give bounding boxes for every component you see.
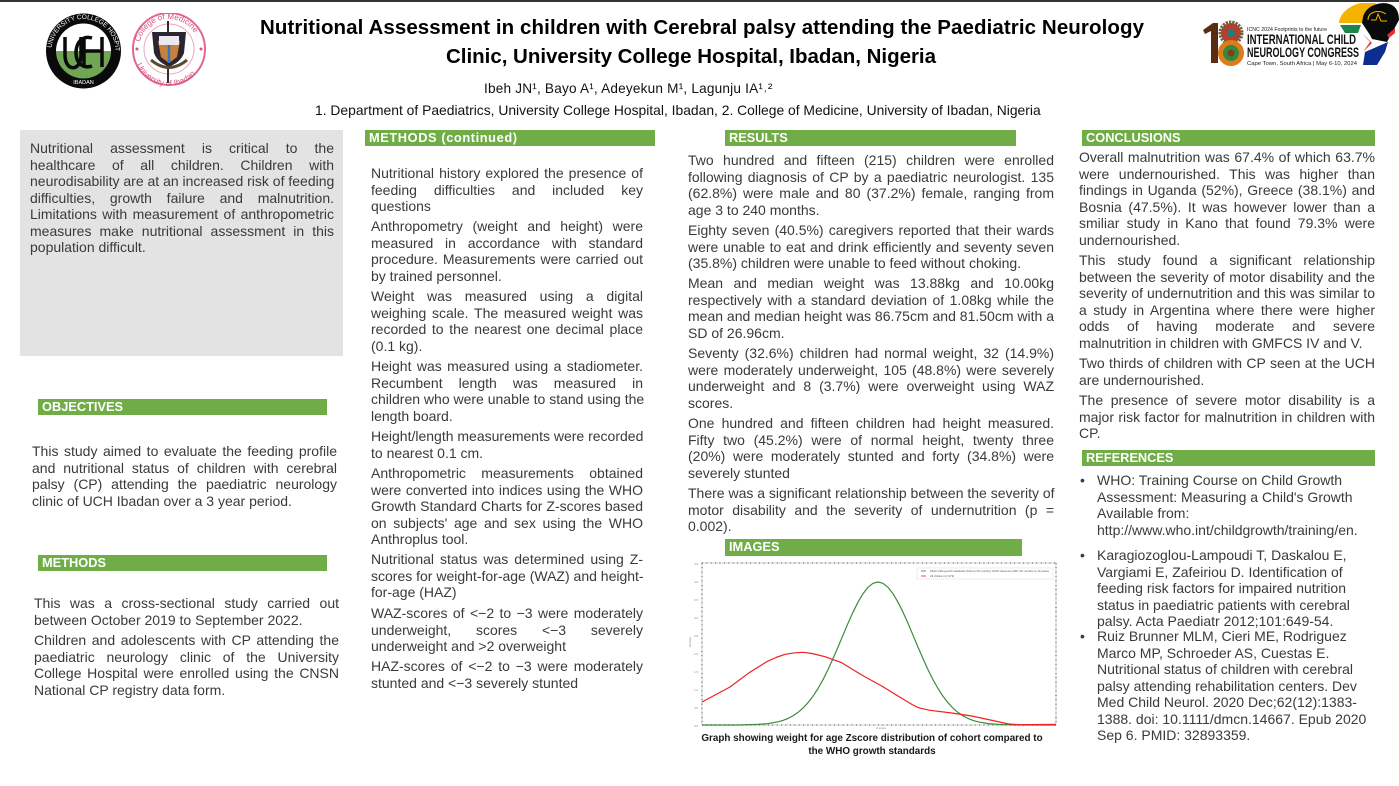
- text: height: length board.: [371, 408, 453, 424]
- chart caption: Graph showing weight for age Zscore distribution of cohort compared to: [701, 733, 1043, 744]
- text: methods enrolment: Children and adolescents with CP attending the: [34, 632, 339, 648]
- text: nutritional status: Nutritional status was determined using Z-: [371, 551, 643, 567]
- text: methods design: This was a cross-sectional study carried out: [34, 595, 339, 611]
- reference 3: [1097, 628, 1366, 743]
- bullet 2: •: [1080, 547, 1085, 563]
- text: methods enrolment: paediatric neurology clinic of the University: [34, 649, 339, 665]
- panel: introduction: [20, 130, 343, 356]
- text: feeding results: Eighty seven (40.5%) caregivers reported that their wards: [688, 222, 1054, 238]
- chart: weight-for-age z-score distribution: 2.0: [694, 652, 699, 656]
- title: Clinic, University College Hospital, Ibadan, Nigeria: [446, 45, 937, 68]
- reference 1: http://www.who.int/childgrowth/training/en.: [1097, 522, 1358, 538]
- text: anthropometry: Anthropometry (weight and height) were: [371, 218, 643, 234]
- text: mean weight and height: SD of 26.96cm.: [688, 325, 784, 341]
- reference 1: Available from:: [1097, 505, 1189, 521]
- logo: College of Medicine: University of Ibadan: [138, 62, 195, 86]
- chart: weight-for-age z-score distribution: 0.5: [694, 706, 699, 710]
- text: WAZ scores: WAZ-scores of <−2 to −3 were moderately: [371, 605, 643, 621]
- curve: WHO standard: [702, 582, 1056, 725]
- text: mean weight and height: respectively with a standard deviation of 1.08kg while the: [688, 292, 1054, 308]
- text: indices: Growth Standard Charts for Z-scores based: [371, 498, 643, 514]
- text: height precision: [371, 428, 643, 461]
- heading: images: IMAGES: [729, 539, 779, 554]
- text: weight categories: Seventy (32.6%) children had normal weight, 32 (14.9%): [688, 345, 1054, 361]
- text: weight: (0.1 kg).: [371, 338, 422, 354]
- text: introduction: Nutritional assessment is critical to the: [30, 140, 334, 156]
- reference 1: WHO: Training Course on Child Growth: [1097, 472, 1342, 488]
- text: introduction: difficulties, growth failure and malnutrition.: [30, 190, 334, 206]
- text: malnutrition comparison: were undernourished. This was higher than: [1079, 166, 1375, 182]
- text: weight: weighing scale. The measured weight was: [371, 305, 643, 321]
- text: height: Recumbent length was measured in: [371, 375, 643, 391]
- reference 2: status in paediatric patients with cerebral: [1097, 597, 1350, 613]
- text: objectives: palsy (CP) attending the paediatric neurology: [32, 476, 337, 492]
- text: mean weight and height: Mean and median weight was 13.88kg and 10.00kg: [688, 275, 1054, 291]
- text: significance: motor disability and the severity of undernutrition (p =: [688, 502, 1054, 518]
- text: height categories: Fifty two (45.2%) were of normal height, twenty three: [688, 432, 1054, 448]
- heading: methods: [38, 555, 327, 571]
- heading: references: REFERENCES: [1086, 450, 1173, 465]
- text: two thirds: [1079, 355, 1375, 388]
- text: malnutrition comparison: [1079, 149, 1376, 248]
- authors: Ibeh JN¹, Bayo A¹, Adeyekun M¹, Lagunju IA¹˒²: [484, 81, 773, 96]
- text: motor disability relationship: This study found a significant relationship: [1079, 252, 1375, 268]
- text: two thirds: Two thirds of children with CP seen at the UCH: [1079, 355, 1375, 371]
- logo: International Child Neurology Congress: ICNC 2024 Footprints to the future: [1247, 27, 1327, 33]
- text: significance: 0.002).: [688, 518, 732, 534]
- text: height categories: severely stunted: [688, 465, 790, 481]
- text: enrolment results: following diagnosis of CP by a paediatric neurologist. 135: [688, 169, 1054, 185]
- text: HAZ scores: stunted and <−3 severely stunted: [371, 675, 578, 691]
- text: WAZ scores: underweight, scores <−3 severely: [371, 622, 643, 638]
- reference 3: Sep 6. PMID: 32893359.: [1097, 727, 1250, 743]
- text: introduction: population difficult.: [30, 239, 146, 255]
- text: risk factor: [1079, 392, 1376, 441]
- reference 3: Nutritional status of children with cerebral: [1097, 661, 1353, 677]
- text: motor disability relationship: odds of having moderate and severe: [1079, 318, 1375, 334]
- text: height: Height was measured using a stadiometer.: [371, 358, 643, 374]
- reference 1: Assessment: Measuring a Child's Growth: [1097, 489, 1353, 505]
- text: height categories: (20%) were moderately stunted and forty (34.8%) were: [688, 448, 1054, 464]
- chart: weight-for-age z-score distribution: 4.0: [694, 580, 699, 584]
- text: nutritional history: [371, 165, 644, 214]
- text: anthropometry: [371, 218, 643, 284]
- logo: International Child Neurology Congress: Cape Town, South Africa | May 6-10, 2024: [1247, 61, 1357, 67]
- text: enrolment results: (62.8%) were male and 80 (37.2%) female, ranging from: [688, 185, 1054, 201]
- text: introduction: neurodisability are at an increased risk of feeding: [30, 173, 334, 189]
- reference 2: Karagiozoglou-Lampoudi T, Daskalou E,: [1097, 547, 1347, 563]
- text: HAZ scores: HAZ-scores of <−2 to −3 were moderately: [371, 658, 643, 674]
- text: height: [371, 358, 644, 424]
- text: malnutrition comparison: Overall malnutrition was 67.4% of which 63.7%: [1079, 149, 1375, 165]
- text: nutritional history: feeding difficulties and included key: [371, 182, 643, 198]
- text: enrolment results: Two hundred and fifteen (215) children were enrolled: [688, 152, 1054, 168]
- bullet 3: •: [1080, 628, 1085, 644]
- chart: weight-for-age z-score distribution: Density: [688, 636, 692, 647]
- text: methods enrolment: [34, 632, 339, 698]
- text: enrolment results: age 3 to 240 months.: [688, 202, 820, 218]
- text: introduction: healthcare of all children. Children with: [30, 157, 334, 173]
- chart: weight-for-age z-score distribution: 3.5: [694, 598, 699, 602]
- text: indices: Anthroplus tool.: [371, 531, 468, 547]
- text: malnutrition comparison: undernourished.: [1079, 232, 1180, 248]
- reference 3: palsy attending rehabilitation centers. Dev: [1097, 678, 1357, 694]
- logo: International Child Neurology Congress: [1203, 3, 1399, 67]
- chart: weight-for-age z-score distribution: 1.5: [694, 670, 699, 674]
- text: motor disability relationship: [1079, 252, 1375, 351]
- text: anthropometry: procedure. Measurements were carried out: [371, 251, 643, 267]
- heading: references: [1082, 450, 1375, 466]
- heading: conclusions: CONCLUSIONS: [1086, 130, 1181, 145]
- text: height categories: One hundred and fifteen children had height measured.: [688, 415, 1054, 431]
- text: motor disability relationship: severity of undernutrition and this was similar to: [1079, 285, 1375, 301]
- reference 3: Med Child Neurol. 2020 Dec;62(12):1383-: [1097, 694, 1357, 710]
- text: nutritional history: Nutritional history explored the presence of: [371, 165, 643, 181]
- text: malnutrition comparison: findings in Uganda (52%), Greece (38.1%) and: [1079, 182, 1375, 198]
- title: [260, 16, 1145, 68]
- text: malnutrition comparison: smiliar study in Kano that found 79.3% were: [1079, 215, 1375, 231]
- text: anthropometry: measured in accordance with standard: [371, 235, 643, 251]
- logo: University College Hospital: [46, 14, 121, 88]
- text: methods design: [34, 595, 339, 628]
- text: motor disability relationship: between the severity of motor disability and the: [1079, 269, 1375, 285]
- text: weight: [371, 288, 643, 354]
- reference 2: Vargiami E, Zafeiriou D. Identification of: [1097, 564, 1343, 580]
- text: feeding results: were unable to eat and drink efficiently and seventy seven: [688, 239, 1054, 255]
- bullet 1: •: [1080, 472, 1085, 488]
- text: height precision: to nearest 0.1 cm.: [371, 445, 483, 461]
- text: risk factor: major risk factor for malnutrition in children with: [1079, 409, 1375, 425]
- text: enrolment results: [688, 152, 1054, 218]
- text: weight categories: were moderately underweight, 105 (48.8%) were severely: [688, 362, 1054, 378]
- text: introduction: Limitations with measurement of anthropometric: [30, 206, 334, 222]
- text: significance: There was a significant relationship between the severity of: [688, 485, 1055, 501]
- chart caption: [701, 733, 1043, 756]
- heading: conclusions: [1082, 130, 1375, 146]
- chart: weight-for-age z-score distribution: 1.0: [694, 688, 699, 692]
- text: risk factor: CP.: [1079, 425, 1101, 441]
- text: weight categories: underweight and 8 (3.7%) were overweight using WAZ: [688, 378, 1054, 394]
- reference 3: Ruiz Brunner MLM, Cieri ME, Rodriguez: [1097, 628, 1347, 644]
- chart: weight-for-age z-score distribution: 3.0: [694, 616, 699, 620]
- heading: objectives: [38, 399, 327, 415]
- chart: weight-for-age z-score distribution: 4.5: [694, 562, 699, 566]
- text: objectives: clinic of UCH Ibadan over a 3 year period.: [32, 493, 292, 509]
- text: indices: were converted into indices using the WHO: [371, 482, 643, 498]
- text: anthropometry: by trained personnel.: [371, 268, 502, 284]
- text: nutritional status: [371, 551, 644, 600]
- reference 1: [1097, 472, 1358, 538]
- heading: results: RESULTS: [729, 130, 788, 145]
- text: methods design: between October 2019 to September 2022.: [34, 612, 303, 628]
- text: WAZ scores: underweight and >2 overweight: [371, 638, 566, 654]
- text: feeding results: [688, 222, 1054, 271]
- text: indices: [371, 465, 643, 547]
- text: height precision: Height/length measurements were recorded: [371, 428, 643, 444]
- top edge bar: [0, 0, 1399, 2]
- text: nutritional status: for-age (HAZ): [371, 584, 457, 600]
- text: methods enrolment: College Hospital were enrolled using the CNSN: [34, 665, 339, 681]
- chart: weight-for-age z-score distribution: 0.0: [694, 724, 699, 728]
- chart caption: the WHO growth standards: [808, 746, 936, 756]
- text: risk factor: The presence of severe motor disability is a: [1079, 392, 1375, 408]
- chart: weight-for-age z-score distribution: 2.5: [694, 634, 699, 638]
- chart: weight-for-age z-score distribution: Z-score: [876, 726, 886, 730]
- logo: University College Hospital: IBADAN: [73, 80, 94, 86]
- text: weight categories: scores.: [688, 395, 733, 411]
- text: weight: Weight was measured using a digital: [371, 288, 643, 304]
- text: weight: recorded to the nearest one decimal place: [371, 321, 643, 337]
- text: motor disability relationship: a study in Argentina where there were higher: [1079, 302, 1375, 318]
- text: indices: Anthropometric measurements obtained: [371, 465, 643, 481]
- reference 2: feeding risk factors for impaired nutrition: [1097, 580, 1346, 596]
- text: malnutrition comparison: Bosnia (47.5%). It was however lower than a: [1079, 199, 1375, 215]
- legend: WHO child growth standards (birth to 60 months), WHO reference 2007 (61 months to 19 years): [930, 569, 1049, 573]
- chart: weight-for-age z-score distribution: [688, 562, 1057, 730]
- text: mean weight and height: mean and median height was 86.75cm and 81.50cm with a: [688, 308, 1054, 324]
- text: WAZ scores: [371, 605, 643, 654]
- heading: methods continued: METHODS (continued): [369, 130, 518, 145]
- reference 2: [1097, 547, 1350, 629]
- text: introduction: measures make nutritional assessment in this: [30, 223, 334, 239]
- text: weight categories: [688, 345, 1054, 411]
- legend: All children (n=172): [930, 574, 954, 578]
- reference 3: 1388. doi: 10.1111/dmcn.14667. Epub 2020: [1097, 711, 1366, 727]
- text: introduction: [30, 140, 334, 255]
- legend: [917, 568, 1053, 579]
- heading: methods: METHODS: [42, 555, 106, 570]
- text: feeding results: (35.8%) children were unable to feed without choking.: [688, 255, 1021, 271]
- text: objectives: and nutritional status of children with cerebral: [32, 460, 337, 476]
- text: methods enrolment: National CP registry data form.: [34, 682, 225, 698]
- text: objectives: This study aimed to evaluate the feeding profile: [32, 443, 337, 459]
- heading: methods continued: [365, 130, 655, 146]
- text: objectives: [32, 443, 337, 509]
- logo: College of Medicine: [132, 13, 206, 86]
- text: HAZ scores: [371, 658, 643, 691]
- text: mean weight and height: [688, 275, 1054, 341]
- affiliations: 1. Department of Paediatrics, University College Hospital, Ibadan, 2. College of Medicine, University of Ibadan, Nigeria: [315, 102, 1041, 118]
- reference 2: palsy. Acta Paediatr 2012;101:649-54.: [1097, 613, 1333, 629]
- text: significance: [688, 485, 1055, 534]
- heading: images: [725, 539, 1022, 556]
- text: motor disability relationship: malnutrition in children with GMFCS IV and V.: [1079, 335, 1362, 351]
- heading: results: [725, 130, 1016, 146]
- title: Nutritional Assessment in children with Cerebral palsy attending the Paediatric Neurology: [260, 16, 1145, 39]
- text: two thirds: are undernourished.: [1079, 372, 1204, 388]
- text: nutritional status: scores for weight-for-age (WAZ) and height-: [371, 568, 644, 584]
- heading: objectives: OBJECTIVES: [42, 399, 123, 414]
- text: height categories: [688, 415, 1054, 481]
- reference 3: Marco MP, Schroeder AS, Cuestas E.: [1097, 645, 1329, 661]
- curve: cohort: [702, 652, 1056, 725]
- text: nutritional history: questions: [371, 198, 431, 214]
- text: height: children who were unable to stand using the: [371, 391, 644, 407]
- text: indices: on subjects' age and sex using the WHO: [371, 515, 643, 531]
